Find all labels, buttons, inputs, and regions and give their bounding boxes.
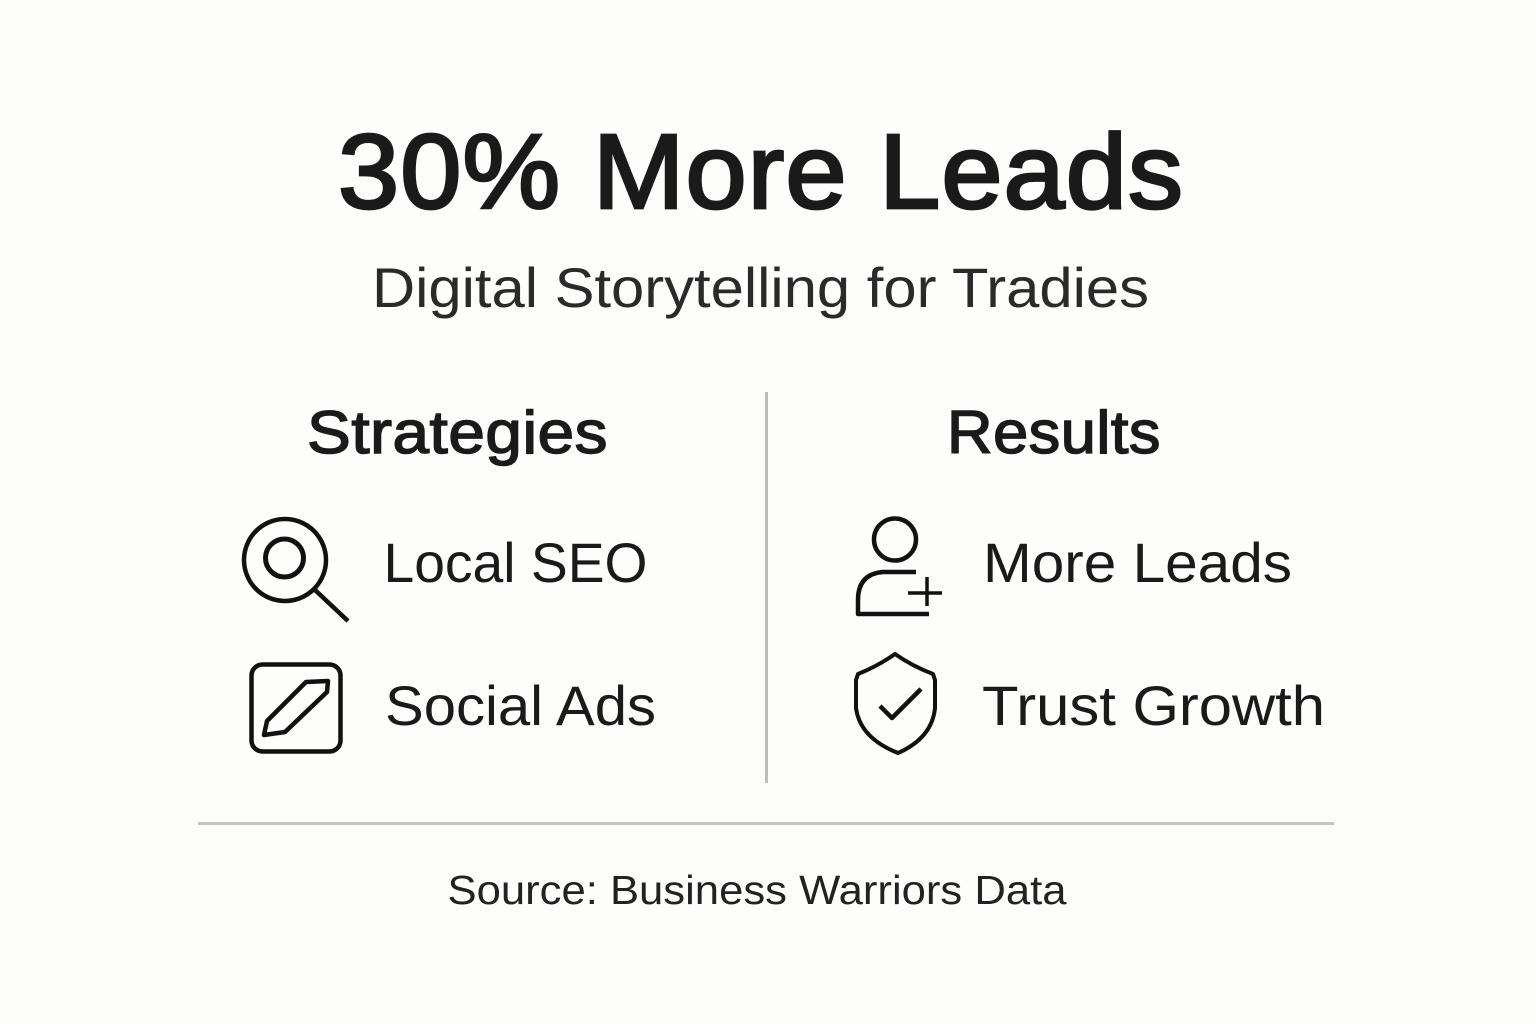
icon: magnifying glass [244,519,348,621]
horizontal divider [198,822,1334,825]
icon: pencil in square [252,664,340,752]
heading: strategies: Strategies [307,399,608,466]
label: social ads: Social Ads [385,674,656,737]
heading: results: Results [947,399,1161,466]
vertical divider [765,392,768,783]
label: trust growth: Trust Growth [982,674,1325,737]
source note: Source: Business Warriors Data [448,867,1067,913]
subtitle: Digital Storytelling for Tradies [372,256,1149,319]
icon: shield with check [856,654,935,753]
label: more leads: More Leads [983,531,1292,594]
label: local seo: Local SEO [384,531,648,594]
icon: person with plus [858,518,942,614]
title: 30% More Leads [338,113,1184,231]
